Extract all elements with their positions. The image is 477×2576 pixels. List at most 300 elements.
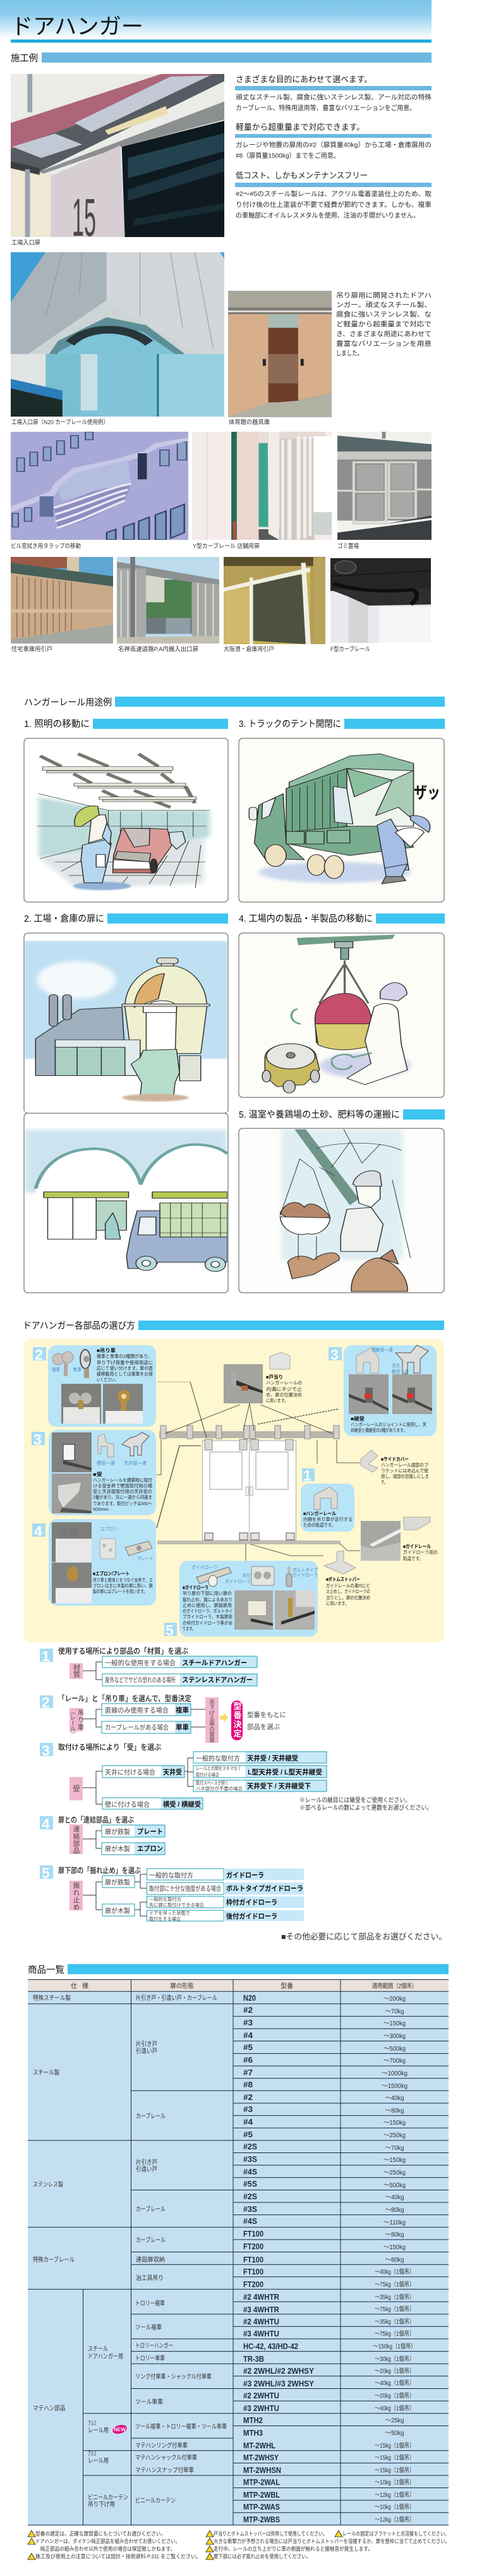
selection step 4: connecting parts: 扉が木製	[105, 1845, 130, 1853]
door stopper photo and text	[224, 1352, 302, 1403]
side cover: 用し、端部の目隠しにしま	[381, 1473, 429, 1479]
column 4 load ranges: ～50kg	[385, 2430, 404, 2437]
door stopper photo and text: に用います。	[266, 1398, 288, 1403]
selection step 2: rail and wheel: 直線のみ使用する場合	[105, 1706, 169, 1714]
card 5: guide rollers: ります。	[183, 1626, 195, 1632]
column 4 load ranges: ～500kg	[383, 2046, 406, 2053]
cautions: 施工及び使用上の注意については設計・技術資料 P.311 をご覧ください。	[35, 2553, 201, 2560]
NEW badge: NEW	[114, 2427, 126, 2433]
card 3 right: rail joints: ハンガーレールのジョイントに使用し、天	[351, 1421, 426, 1427]
column 3 model numbers: MTH3	[243, 2429, 263, 2438]
bottom stopper: ス止めし、ガイドローラの	[326, 1588, 370, 1594]
column 3 model numbers: #3S	[243, 2155, 257, 2164]
photo: gymnasium storage	[228, 291, 332, 417]
caption: ビル窓拭き用タラップの移動	[11, 542, 81, 550]
guide rail: ガイドローラ用の	[403, 1549, 438, 1555]
illustration: truck tent	[239, 738, 444, 902]
column 4 load ranges: ～250kg	[383, 2170, 406, 2176]
selection step 5: sway stoppers: ドアを吊った状態で	[149, 1910, 190, 1916]
usage heading 5: 5. 温室や養鶏場の土砂、肥料等の運搬に	[239, 1109, 400, 1120]
section heading: 商品一覧	[28, 1964, 449, 1975]
selection step 2: rail and wheel: カーブレールがある場合	[105, 1723, 169, 1731]
column 4 load ranges: ～75kg（1個吊）	[375, 2305, 414, 2313]
card 4 left: apron and plate: 吊り車と扉体とをつなぐ金具で、エ	[93, 1577, 153, 1583]
selection step 5: sway stoppers: 一般的な取付方	[149, 1871, 193, 1879]
column 2 labels: マテハンシャックル付単車	[135, 2453, 197, 2462]
column 3 model numbers: #3	[243, 2105, 253, 2114]
photo: building window cleaning tarp	[11, 432, 188, 540]
selection step 2: rail and wheel: （レール）	[69, 1709, 76, 1737]
column 4 load ranges	[373, 1996, 416, 2524]
photos: brackets	[52, 1432, 92, 1513]
hanger rail	[159, 1431, 339, 1438]
section heading: ハンガーレール用途例: ハンガーレール用途例	[24, 697, 112, 708]
column 3 model numbers: MTP-2WAS	[243, 2503, 280, 2512]
column 4 load ranges: ～15kg（1個吊）	[375, 2441, 414, 2450]
selection step 3: brackets: 天井受	[163, 1767, 182, 1776]
section heading: 施工例	[11, 52, 432, 64]
photo: factory entrance door 15	[11, 74, 224, 247]
caption: 体育館の器具庫	[229, 418, 270, 426]
column 2 labels: トロリー複車	[135, 2299, 165, 2307]
icon: guide rail	[403, 1517, 430, 1530]
selection step 1: material: 材質	[72, 1663, 80, 1678]
column 2 labels: ビニールカーテン	[135, 2497, 176, 2505]
column 3 model numbers: #5	[243, 2130, 253, 2139]
photo: F-type curve rail	[330, 558, 431, 643]
card 5: guide rollers: 止めに使用し、鉄製扉用	[183, 1602, 232, 1608]
bottom stopper: ■ボトムストッパー	[326, 1576, 360, 1582]
selection step 3: brackets: 壁に付ける場合	[105, 1800, 150, 1809]
card 3 left: brackets: ■受	[93, 1471, 102, 1477]
column 2 labels: ツール複車・トロリー複車・ツール単車	[135, 2422, 227, 2431]
table rules	[28, 1979, 449, 2525]
column 4 load ranges: ～80kg	[385, 2207, 404, 2214]
icon: wheels	[52, 1350, 90, 1378]
selection step 3: brackets: 天井受 / 天井継受	[247, 1754, 298, 1762]
column 4 load ranges: ～40kg	[385, 2194, 404, 2201]
text block: features: り付け後の仕上塗装が不要で経費が節約できます。しかも、複車	[236, 200, 432, 209]
column 2 labels: 片引き戸	[136, 2040, 157, 2048]
column 3 model numbers	[243, 1994, 315, 2524]
text block: features: カーブレール、特殊用途用等、豊富なバリエーションをご用意。	[236, 104, 416, 112]
selection step 5: sway stoppers: 扉が鉄製	[105, 1878, 130, 1886]
selection step 2: rail and wheel: 吊下げる扉の質量	[208, 1699, 215, 1742]
column 2 labels: トロリーハンガー	[135, 2342, 173, 2350]
column 4 load ranges: ～40kg（1個吊）	[375, 2268, 414, 2276]
card 2: hanging wheels: 線移動用としては複車をお使	[97, 1370, 153, 1377]
selection step 2: rail and wheel: 型番をもとに	[247, 1711, 286, 1719]
text block: features: #8（扉質量1500kg）までをご用意。	[236, 152, 340, 159]
selection step 5: sway stoppers: 5	[42, 1865, 50, 1881]
feature heading 2: 軽量から超重量まで対応できます。	[236, 123, 365, 131]
selection step 5: sway stoppers: 枠付ガイドローラ	[226, 1898, 277, 1907]
column 1 labels: ビニールカーテン	[88, 2494, 128, 2501]
card 4 left: apron and plate: 製の扉にはプレートを用います。	[93, 1588, 147, 1594]
caption: 工場入口扉（N20 カーブレール使用例）	[11, 418, 109, 426]
bottom stopper	[324, 1551, 370, 1606]
section heading: 部品の選び方: ドアハンガー各部品の選び方	[23, 1321, 135, 1331]
card 5: guide rollers: の枠付ガイドローラ等があ	[183, 1620, 232, 1626]
card 2: hanging wheels: 2	[35, 1346, 43, 1363]
selection step 3: brackets: レールとの間をスキマなく	[196, 1766, 241, 1771]
selection step 3: brackets: 3	[42, 1742, 50, 1759]
table header: 扉の形態	[171, 1982, 193, 1990]
caption: ゴミ置場	[337, 542, 359, 550]
selection step 4: connecting parts: 連結部品	[72, 1825, 80, 1854]
notes: ※レールの継目には継受をご使用ください。	[299, 1796, 411, 1804]
column 2 labels: カーブレール	[136, 2236, 166, 2244]
photos: wheels on door	[61, 1384, 143, 1424]
card 2: hanging wheels: 応じて使い分けます。扉の直	[97, 1365, 153, 1371]
card 2: hanging wheels: いください。	[97, 1377, 118, 1383]
card 4 left: apron and plate: エプロン	[100, 1526, 117, 1532]
selection step 1: material: ステンレスドアハンガー	[182, 1675, 253, 1684]
selection step 4: connecting parts: 4	[42, 1816, 50, 1832]
column 3 model numbers: N20	[243, 1994, 256, 2003]
icon: door stopper	[270, 1352, 290, 1369]
column 3 model numbers: MT-2WHSN	[243, 2466, 281, 2475]
column 1 labels: ステンレス製	[33, 2180, 63, 2188]
caption: 大阪港・倉庫用引戸	[224, 645, 274, 653]
selection step 5: sway stoppers: 取付部に十分な強度がある場合	[149, 1884, 221, 1893]
heading: 扉との「連結部品」を選ぶ	[58, 1815, 134, 1824]
column 1 labels: アルミ	[88, 2451, 97, 2458]
card 3 left: brackets: であります。取付ピッチは450～	[93, 1500, 152, 1506]
card 3 left: brackets: 500mm	[93, 1506, 109, 1512]
column 4 load ranges: ～40kg	[385, 2095, 404, 2102]
column 2 labels: マテハンスナップ付単車	[135, 2466, 194, 2474]
section heading: ハンガーレール用途例	[24, 697, 445, 708]
card 3 right: rail joints: ■継受	[351, 1415, 365, 1422]
selection step 4: connecting parts: エプロン	[137, 1845, 163, 1853]
selection step 3: brackets: 取付スペースが狭く	[196, 1779, 229, 1786]
text block: hanger description: ど軽量から超重量まで対応で	[336, 320, 432, 328]
selection step 5: sway stoppers: 先に扉に取付けできる場合	[149, 1901, 204, 1908]
column 3 model numbers: #4	[243, 2118, 253, 2127]
caption: 工場入口扉	[11, 239, 40, 247]
column 3 model numbers: #5	[243, 2043, 253, 2052]
column 4 load ranges: ～200kg	[383, 1996, 406, 2003]
selection step 5: sway stoppers: 後付ガイドローラ	[226, 1912, 277, 1920]
icons: bracket parts	[98, 1432, 149, 1457]
selection step 3: brackets: ※並べるレールの数によって連数をお選びください。	[299, 1804, 432, 1812]
card 3 left: brackets	[32, 1430, 156, 1515]
door stopper photo and text: ■戸当り	[266, 1374, 283, 1380]
card 1: hanger rail: 1	[303, 1467, 311, 1484]
card 3 left: brackets: ハンガーレールを建築物に取付	[93, 1477, 152, 1483]
column 4 load ranges: ～12kg（1個吊）	[375, 2491, 414, 2499]
text block: hanger description	[336, 291, 432, 357]
section heading: 商品一覧: 商品一覧	[28, 1965, 64, 1975]
column 3 model numbers: FT100	[243, 2256, 263, 2264]
selection step 2: rail and wheel: 吊り車	[76, 1709, 83, 1731]
column 3 model numbers: HC-42, 43/HD-42	[243, 2342, 298, 2351]
card 4 left: apron and plate: プロンは主に木製の扉に用い、鉄	[93, 1582, 153, 1589]
text block: features: の車軸部にオイルレスメタルを使用、注油の手間がいりません。	[236, 211, 420, 219]
column 4 load ranges: ～80kg	[385, 2257, 404, 2264]
column 4 load ranges: ～1500kg	[382, 2083, 408, 2090]
side cover: ラケットにはめ込んで使	[381, 1467, 428, 1474]
card 5: guide rollers: ■ガイドローラ	[183, 1584, 208, 1590]
usage heading 3	[239, 719, 445, 729]
guide rail bottom	[157, 1541, 341, 1544]
column 4 load ranges: ～40kg（1個吊）	[375, 2379, 414, 2387]
bottom stopper: に用います。	[326, 1601, 349, 1606]
feature heading 1: さまざまな目的にあわせて選べます。	[236, 75, 372, 84]
column 1 labels: レール用	[88, 2427, 109, 2434]
column 3 model numbers: #5S	[243, 2180, 257, 2188]
selection step 3: brackets: 一般的な取付方	[196, 1754, 240, 1762]
column 1 labels: ドアハンガー用	[88, 2353, 123, 2360]
card 1: hanger rail: ■ハンガーレール	[303, 1510, 336, 1517]
column 2 labels: 引違い戸	[136, 2165, 157, 2173]
card 4 left: apron and plate	[32, 1519, 156, 1606]
selection step 2: rail and wheel: 2	[42, 1694, 50, 1711]
column 3 model numbers: FT100	[243, 2230, 263, 2238]
feature heading 3: 低コスト、しかもメンテナンスフリー	[236, 171, 368, 180]
usage heading 1	[24, 719, 228, 729]
cautions	[28, 2530, 450, 2560]
photos: joint	[349, 1374, 432, 1414]
column 3 model numbers: #2S	[243, 2142, 257, 2151]
column 4 load ranges: ～15kg（1個吊）	[375, 2466, 414, 2474]
selection step 5: sway stoppers: 一般的な取付方	[149, 1896, 181, 1902]
photo: house garage sliding door	[11, 557, 113, 644]
card 2: hanging wheels	[33, 1345, 156, 1427]
selection step 1: material: スチールドアハンガー	[182, 1658, 247, 1667]
selection step 3: brackets	[40, 1742, 432, 1812]
usage heading 4: 4. 工場内の製品・半製品の移動に	[239, 913, 373, 924]
illustration: truck tent: ザッ	[414, 783, 440, 802]
card 1: hanger rail	[301, 1467, 354, 1532]
column 3 model numbers: #8	[243, 2080, 253, 2089]
door and rail diagram	[157, 1382, 360, 1561]
column 3 model numbers: #2 4WHTR	[243, 2293, 279, 2302]
card 3 left: brackets: 天井受一連	[124, 1460, 147, 1466]
column 2 labels: リング付単車・シャックル付単車	[135, 2372, 212, 2381]
text block: hanger description: ンガー。頑丈なスチール製、	[336, 301, 432, 308]
card 3 right: rail joints: 継受一連	[392, 1369, 409, 1374]
selection step 4: connecting parts	[40, 1815, 165, 1855]
cautions: 純正部品の組み合わせ以外で使用の場合は保証致しかねます。	[35, 2545, 175, 2552]
illustration: factory and worker	[24, 933, 228, 1113]
column 3 model numbers: #2	[243, 2006, 253, 2015]
column 2 labels: 片引き戸・引違い戸・カーブレール	[136, 1994, 217, 2002]
icon: rail section	[314, 1487, 337, 1510]
column 4 load ranges: ～80kg	[385, 2231, 404, 2238]
cautions: レールの固定はブラケットと点溶接をしてください。	[342, 2530, 449, 2537]
column 4 load ranges: ～70kg	[385, 2008, 404, 2015]
text block: hanger description: 吊り扉用に開発されたドアハ	[336, 291, 432, 300]
column 4 load ranges: ～25kg	[385, 2417, 404, 2424]
card 1: hanger rail: 内側を吊り車が走行する	[303, 1516, 353, 1522]
column 3 model numbers: MT-2WHSY	[243, 2453, 279, 2462]
card 3 left: brackets: 受と天井面取付用の天井受の	[93, 1488, 152, 1494]
card 3 left: brackets: ける受金具で壁面取付用の横	[93, 1482, 152, 1489]
title: ドアハンガー	[11, 15, 143, 39]
selection step 3: brackets: ハネ部分が不要の場合	[196, 1785, 243, 1792]
heading: 取付ける場所により「受」を選ぶ	[58, 1742, 161, 1752]
photo: garbage yard	[337, 432, 432, 540]
column 4 load ranges: ～110kg	[383, 2219, 406, 2226]
column 3 model numbers: #3 2WHL/#3 2WHSY	[243, 2379, 315, 2388]
card 5: guide rollers: 吊り扉の下部に用い扉の	[183, 1590, 232, 1596]
selection step 1: material: 屋外などでサビの恐れのある場所	[105, 1676, 176, 1684]
column 3 model numbers: #2	[243, 2093, 253, 2102]
column 2 labels: カーブレール	[136, 2112, 166, 2120]
icons: joint brackets	[356, 1345, 428, 1374]
photo: factory entrance door 15: 15	[72, 188, 96, 247]
illustration: greenhouse soil transport	[239, 1128, 444, 1293]
card 3 right: rail joints: 3	[330, 1346, 339, 1363]
bottom stopper: ガイドレールの溝内にビ	[326, 1582, 370, 1589]
selection step 2: rail and wheel: 部品を選ぶ	[247, 1723, 280, 1731]
caption: F型カーブレール	[330, 645, 370, 653]
column 2 labels: 治工具吊り	[136, 2274, 164, 2282]
card 4 left: apron and plate: 4	[34, 1523, 42, 1539]
selection step 3: brackets: L型天井受 / L型天井継受	[248, 1767, 322, 1776]
column 1 labels: アルミ	[88, 2420, 97, 2427]
photos: guide roller	[234, 1590, 315, 1630]
usage heading 4	[239, 913, 445, 924]
card 4 left: apron and plate: プレート	[136, 1556, 154, 1561]
selection step 3: brackets: 取付ける場合	[196, 1771, 219, 1778]
selection step 5: sway stoppers: ガイドローラ	[226, 1871, 264, 1879]
column 4 load ranges: ～80kg	[385, 2108, 404, 2115]
column 3 model numbers: MTP-2WAL	[243, 2478, 280, 2487]
column 1 labels: レール用	[88, 2458, 109, 2465]
card 5: guide rollers: プガイドローラ、木製扉用	[183, 1613, 232, 1620]
cautions: 走行中、レールの立ち上がりに車の側面が触れると接触音が発生します。	[214, 2545, 373, 2552]
column 1 labels	[33, 1994, 128, 2508]
card 2: hanging wheels: ■吊り車	[97, 1347, 116, 1353]
selection step 5: sway stoppers	[40, 1865, 304, 1922]
column 2 labels: トロリー単車	[135, 2354, 165, 2362]
usage heading 2: 2. 工場・倉庫の扉に	[24, 913, 104, 924]
page header banner	[0, 0, 432, 43]
caption: 住宅車庫用引戸	[11, 645, 52, 653]
column 3 model numbers: #3 4WHTU	[243, 2329, 279, 2338]
selection step 5: sway stoppers: 扉が木製	[105, 1907, 130, 1915]
card 5: guide rollers: ガイドローラ	[225, 1578, 251, 1584]
door stopper photo and text: ハンガーレールの	[266, 1379, 302, 1386]
column 4 load ranges: ～10kg（1個吊）	[375, 2478, 414, 2486]
card 3 right: rail joints: 天井	[392, 1363, 400, 1369]
door stopper photo and text: め、扉の位置決め	[266, 1391, 302, 1398]
column 3 model numbers: #4	[243, 2031, 253, 2040]
column 4 load ranges: ～150kg	[383, 2120, 406, 2127]
column 3 model numbers: #7	[243, 2068, 253, 2077]
text block: hanger description: 腐食に強いステンレス製、な	[336, 310, 432, 319]
selection step 5: sway stoppers: 振れ止め	[72, 1881, 80, 1911]
caption: 名神高速道路P.A内搬入出口扉	[118, 645, 198, 653]
card 3 right: rail joints: 井継受と横継受の2種があります。	[351, 1427, 407, 1433]
column 3 model numbers: MTP-2WBL	[243, 2491, 280, 2500]
usage heading 2	[24, 913, 228, 924]
illustration: moving lights in factory	[24, 738, 228, 902]
column 1 labels: 特殊スチール製	[33, 1994, 71, 2002]
illustration: lifting products with chain	[239, 933, 444, 1097]
text block: features: 頑丈なスチール製、腐食に強いステンレス製、アール対応の特殊	[236, 93, 432, 101]
column 3 model numbers: TR-3B	[243, 2355, 264, 2364]
column 4 load ranges: ～35kg（1個吊）	[375, 2293, 414, 2301]
selection step 1: material	[40, 1646, 257, 1686]
selection step 2: rail and wheel: 複車	[176, 1706, 189, 1714]
guide rail: 軌道です。	[403, 1555, 423, 1561]
column 3 model numbers: MTH2	[243, 2416, 263, 2425]
card 4 left: apron and plate: ■エプロン/プレート	[93, 1571, 130, 1577]
card 5: guide rollers: ガイドローラ	[293, 1572, 318, 1578]
text block: features: ガレージや物置の扉用の#2（扉質量40kg）から工場・倉庫扉用の	[236, 140, 432, 149]
selection step 5: sway stoppers: 取付をする場合	[149, 1915, 181, 1922]
section heading: 部品の選び方	[23, 1321, 444, 1331]
column 3 model numbers: #2S	[243, 2192, 257, 2201]
column 4 load ranges: ～700kg	[383, 2058, 406, 2065]
side cover: ■サイドカバー	[381, 1456, 409, 1462]
column 3 model numbers: #3S	[243, 2205, 257, 2214]
caption: Y型カーブレール 店舗用扉	[193, 542, 260, 550]
column 4 load ranges: ～70kg	[385, 2145, 404, 2152]
column 3 model numbers: #4S	[243, 2217, 257, 2226]
note: other parts: ■その他必要に応じて部品をお選びください。	[281, 1932, 447, 1941]
column 3 model numbers: #3 4WHTR	[243, 2305, 279, 2314]
guide rail	[361, 1517, 438, 1561]
card 5: guide rollers: 枠付	[243, 1573, 250, 1578]
card 5: guide rollers: 振れ止め、風によるあおり	[183, 1596, 232, 1602]
photo: Osaka port warehouse door	[224, 557, 325, 644]
cautions: 型番の選定は、正確な扉質量にもとづいてお選びください。	[35, 2530, 166, 2537]
column 3 model numbers: MT-2WHL	[243, 2441, 275, 2450]
text block: features	[235, 75, 432, 219]
card 3 left: brackets: 3	[33, 1431, 42, 1448]
column 2 labels: 引違い戸	[136, 2047, 157, 2055]
column 2 labels: 片引き戸	[136, 2158, 157, 2166]
usage heading 3: 3. トラックのテント開閉に	[239, 719, 341, 729]
heading: 「レール」と「吊り車」を選んで、型番決定	[58, 1694, 191, 1703]
column 1 labels: マテハン部品	[33, 2405, 66, 2412]
column 4 load ranges: ～150kg	[383, 2244, 406, 2251]
card 3 right: rail joints	[329, 1345, 437, 1436]
column 4 load ranges: ～15kg（1個吊）	[375, 2453, 414, 2462]
illustration: greenhouse doors and truck	[24, 1113, 228, 1293]
cautions: ドアハンガーは、ダイケン純正部品を組み合わせてお使いください。	[35, 2537, 180, 2544]
card 2: hanging wheels: 複車と単車の2種類があり、	[97, 1353, 152, 1359]
text block: hanger description: しました。	[336, 350, 363, 357]
card 2: hanging wheels: 複車	[52, 1367, 61, 1372]
column 4 load ranges: ～1000kg	[382, 2070, 408, 2077]
bottom stopper: 当りとし、扉の位置決め	[326, 1594, 370, 1601]
column 4 load ranges: ～150kg	[383, 2157, 406, 2164]
card 5: guide rollers: のガイドローラ、ボルトタイ	[183, 1608, 232, 1614]
connector lines	[157, 1382, 360, 1561]
card 3 left: brackets: 横受一連	[97, 1460, 116, 1466]
column 4 load ranges: ～20kg（1個吊）	[375, 2391, 414, 2400]
column 4 load ranges: ～12kg（1個吊）	[375, 2515, 414, 2524]
column 2 labels: カーブレール	[136, 2205, 166, 2213]
column 4 load ranges: ～500kg	[383, 2182, 406, 2189]
column 3 model numbers: #3 2WHTU	[243, 2404, 279, 2413]
column 4 load ranges: ～150kg（1個吊）	[373, 2342, 416, 2350]
column 2 labels	[135, 1994, 227, 2505]
column 1 labels: 吊り下げ用	[88, 2501, 115, 2508]
column 1 labels: 特殊カーブレール	[33, 2256, 75, 2264]
door stopper photo and text: 内溝にネジで止	[266, 1386, 302, 1392]
arrow	[220, 1712, 228, 1723]
usage heading 1: 1. 照明の移動に	[24, 719, 90, 729]
column 3 model numbers: FT200	[243, 2242, 263, 2251]
column 3 model numbers: #2 2WHTU	[243, 2391, 279, 2400]
